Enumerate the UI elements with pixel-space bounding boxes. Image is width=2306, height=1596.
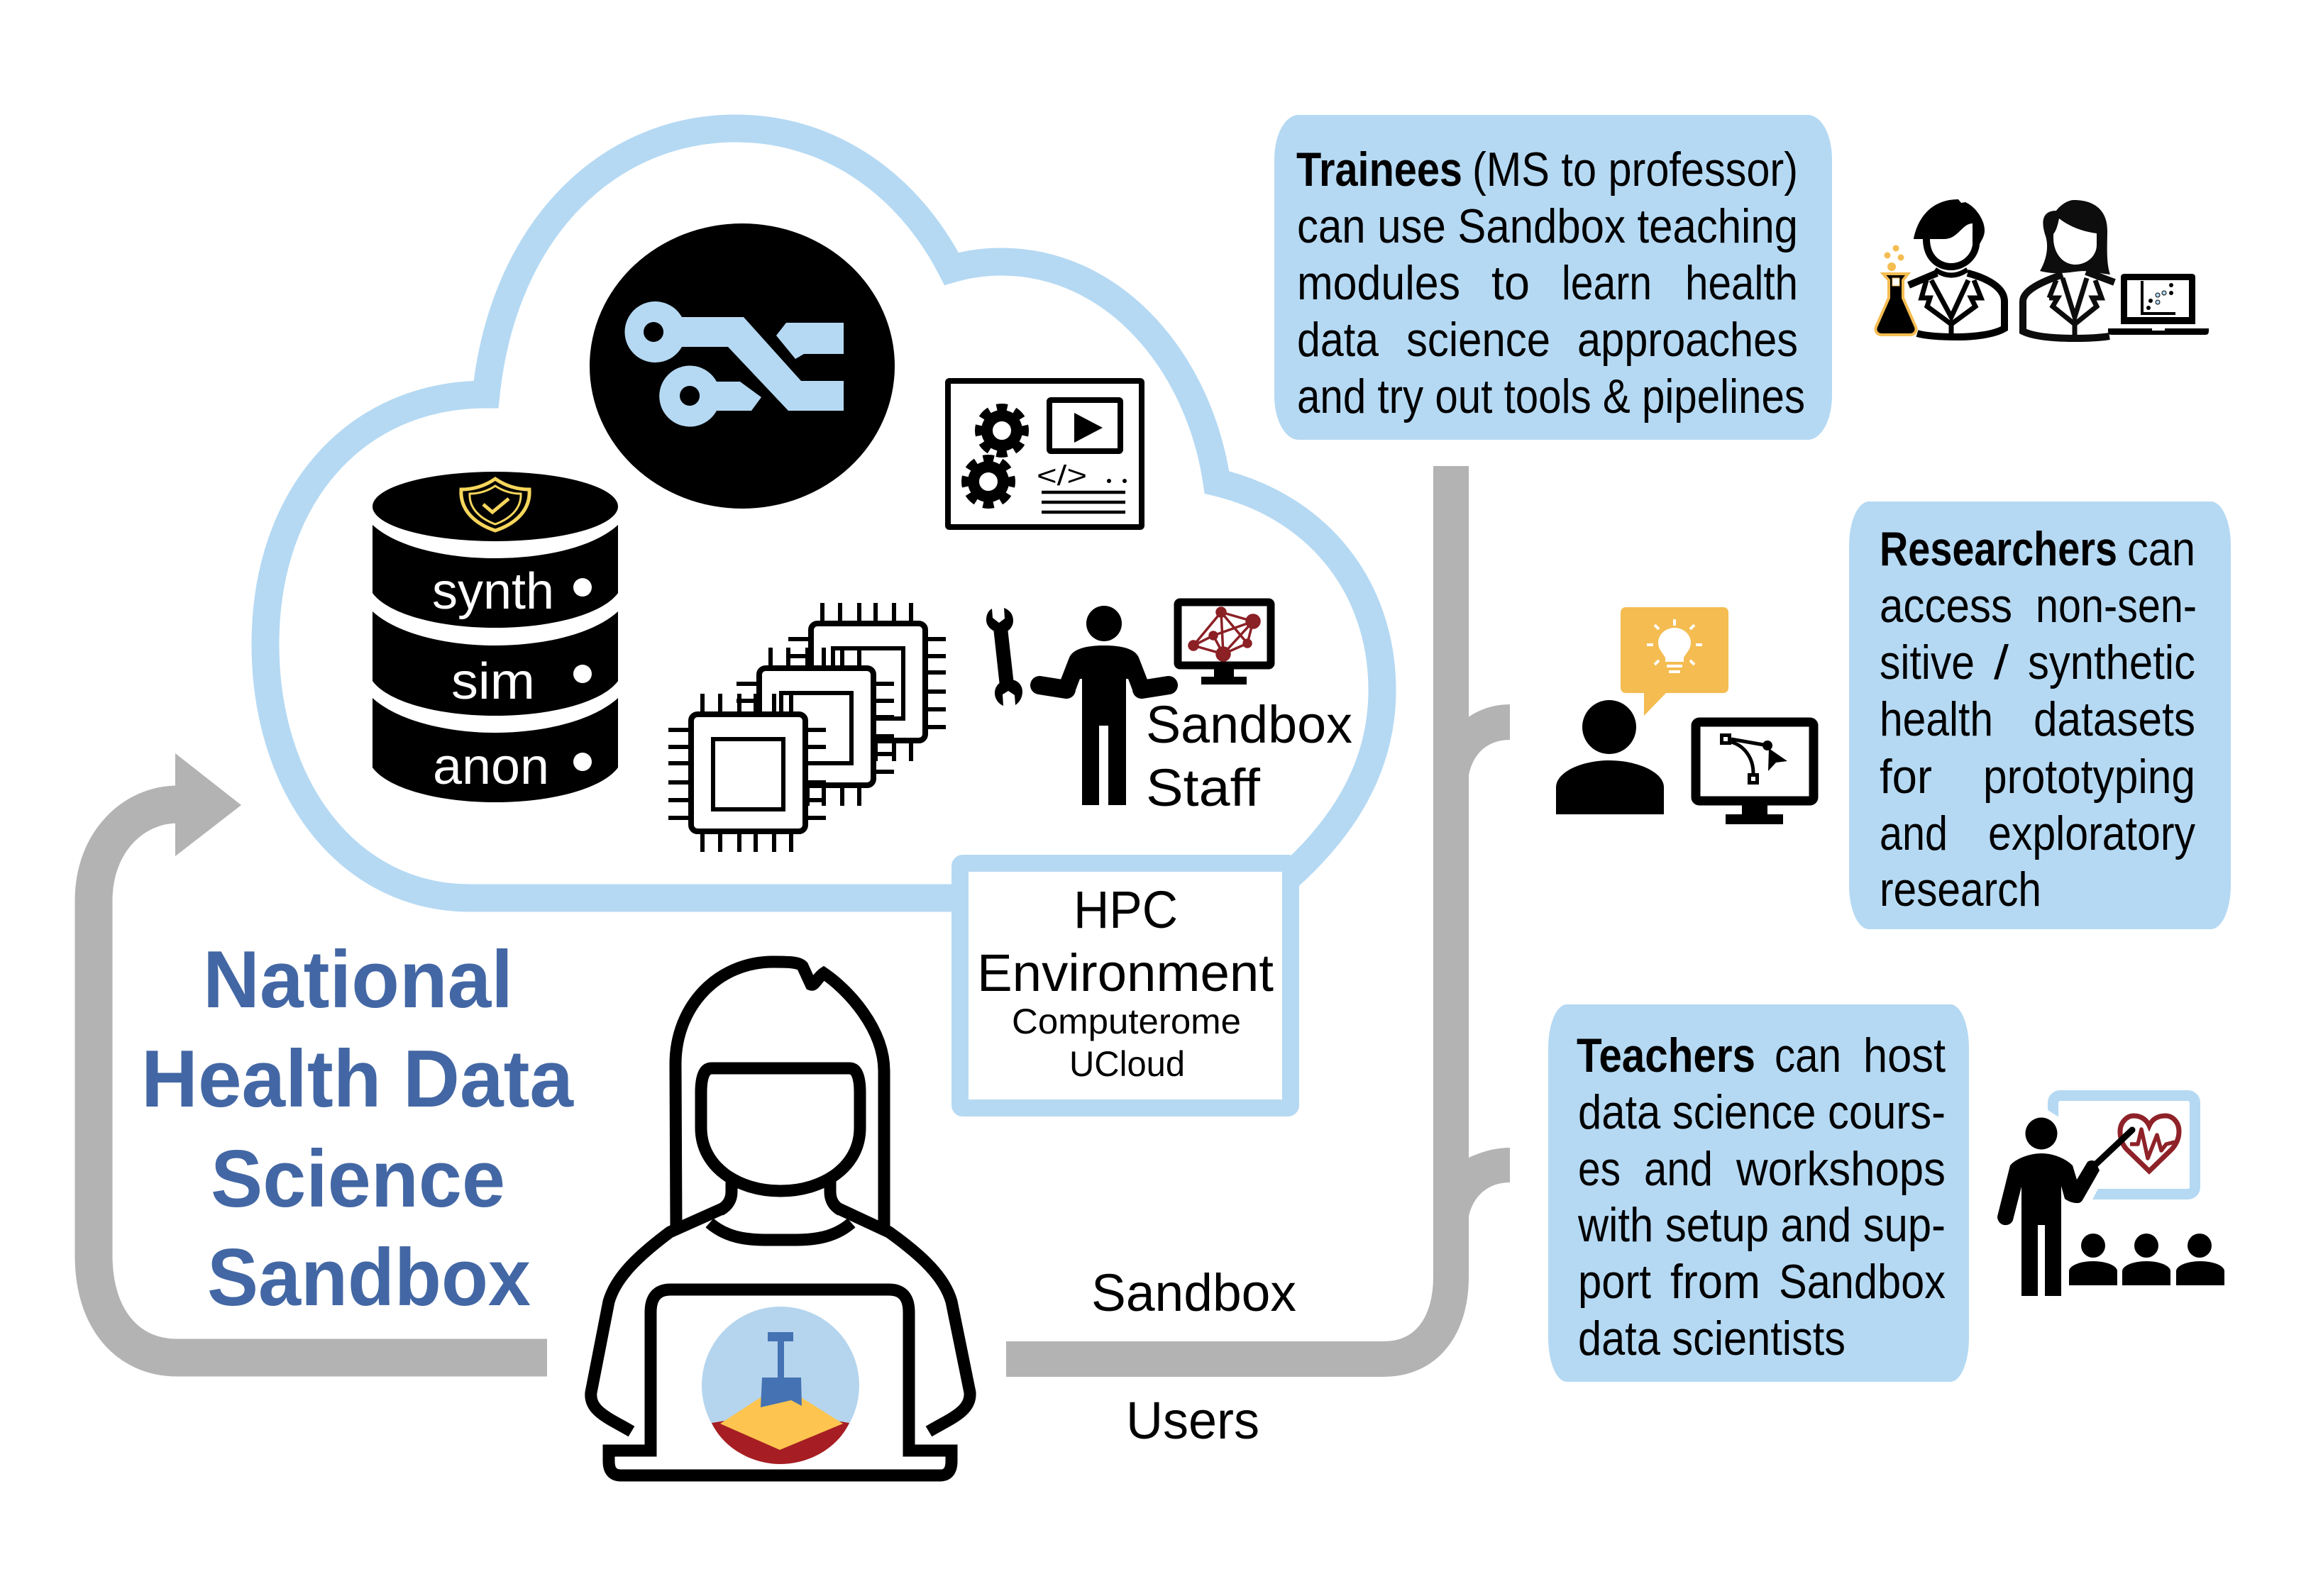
panel: researchers: synthetic	[2028, 636, 2195, 689]
icon: audience	[2069, 1234, 2224, 1285]
cloud outline	[265, 128, 1382, 898]
title: Health Data	[141, 1034, 575, 1124]
panel: researchers: health	[1880, 692, 1993, 746]
icon: tools and video panel: </>	[1037, 460, 1087, 492]
icon: shield	[461, 479, 529, 531]
icon: researcher figure	[1556, 700, 1664, 814]
label: Sandbox Staff: Sandbox	[1146, 695, 1352, 754]
icon: tools and video panel	[948, 381, 1142, 527]
panel: trainees: approaches	[1577, 313, 1798, 367]
icon: wrench	[986, 608, 1022, 706]
icon: researcher with idea and monitor	[1556, 607, 1814, 824]
panel: researchers: research	[1880, 863, 2041, 916]
arrow: feedback loop to the cloud	[94, 753, 547, 1358]
icon: black circle with data pipeline keys	[590, 223, 895, 509]
panel: trainees: can use Sandbox teaching	[1297, 199, 1798, 253]
panel: teachers: data science cours-	[1578, 1085, 1946, 1139]
label: synth: synth	[432, 563, 554, 620]
icon: sandbox staff figure	[1039, 606, 1169, 805]
panel: teachers: workshops	[1736, 1142, 1946, 1196]
logo: sandbox shovel	[702, 1307, 859, 1464]
panel: researchers	[1849, 501, 2231, 929]
panel: trainees: data	[1297, 313, 1379, 367]
UCloud label: UCloud	[1069, 1044, 1185, 1084]
label: Sandbox Staff: Staff	[1146, 758, 1260, 817]
panel: researchers: access	[1880, 579, 2012, 633]
panel: researchers: can	[2127, 522, 2195, 576]
HPC environment box	[960, 863, 1291, 1108]
panel: trainees: health	[1685, 256, 1798, 310]
icon: laptop with scatter plot	[2108, 274, 2209, 335]
panel: researchers: exploratory	[1988, 807, 2195, 860]
panel: teachers: Sandbox	[1779, 1255, 1946, 1309]
panel: researchers: prototyping	[1983, 750, 2195, 804]
panel: teachers: from	[1670, 1255, 1760, 1309]
panel: teachers: and	[1644, 1142, 1713, 1196]
panel: trainees	[1274, 115, 1832, 440]
Environment label: Environment	[977, 943, 1274, 1002]
figure: sandbox user with laptop	[591, 962, 970, 1475]
icon: teacher figure	[1997, 1118, 2132, 1296]
icon: heart with pulse	[2120, 1116, 2179, 1171]
title: National	[203, 935, 513, 1025]
title: Science	[211, 1134, 505, 1224]
icon: database with security shield	[373, 472, 618, 802]
icon: flask	[1875, 245, 1916, 335]
panel: trainees: (MS to professor)	[1472, 143, 1798, 196]
HPC heading: HPC	[1074, 880, 1178, 939]
icon: female trainee	[2023, 200, 2114, 338]
panel: trainees: Trainees	[1296, 143, 1462, 196]
panel: researchers: non-sen-	[2036, 579, 2197, 633]
icon: male trainee	[1909, 199, 2004, 337]
icon: stacked compute chips	[668, 603, 946, 852]
panel: trainees: to	[1491, 256, 1530, 310]
title	[141, 935, 575, 1323]
label: sim: sim	[451, 653, 535, 710]
arrow: sandbox users branch line	[1006, 466, 1510, 1359]
panel: teachers: Teachers	[1577, 1029, 1755, 1082]
panel: trainees: learn	[1562, 256, 1652, 310]
panel: teachers	[1548, 1004, 1969, 1382]
panel: trainees: and try out tools & pipelines	[1297, 370, 1805, 423]
panel: researchers: datasets	[2034, 692, 2195, 746]
panel: trainees: science	[1406, 313, 1550, 367]
panel: teachers: es	[1578, 1142, 1621, 1196]
panel: researchers: sitive	[1880, 636, 1975, 689]
panel: researchers: and	[1880, 807, 1948, 860]
label: Sandbox Staff	[1146, 695, 1352, 817]
label: Sandbox: Sandbox	[1091, 1263, 1296, 1322]
panel: teachers: data scientists	[1578, 1312, 1846, 1365]
panel: researchers: Researchers	[1880, 522, 2117, 576]
icon: trainees with flask and laptop	[1875, 199, 2209, 338]
label: anon: anon	[433, 738, 549, 795]
icon: teacher presenting heart chart to audience	[1997, 1095, 2224, 1296]
panel: researchers: /	[1994, 636, 2009, 689]
panel: researchers: for	[1880, 750, 1932, 804]
Computerome label: Computerome	[1012, 1002, 1241, 1041]
icon: presentation board	[2043, 1095, 2195, 1202]
panel: teachers: can	[1775, 1029, 1841, 1082]
icon: monitor with network graph	[1178, 602, 1271, 685]
panel: trainees: modules	[1297, 256, 1460, 310]
panel: teachers: port	[1578, 1255, 1651, 1309]
title: Sandbox	[207, 1233, 531, 1323]
laptop	[609, 1290, 951, 1475]
icon: lightbulb speech bubble	[1621, 607, 1728, 716]
panel: teachers: with setup and sup-	[1577, 1198, 1946, 1252]
label: Users: Users	[1126, 1391, 1259, 1450]
icon: monitor with vector curve	[1696, 722, 1814, 824]
panel: teachers: host	[1863, 1029, 1946, 1082]
